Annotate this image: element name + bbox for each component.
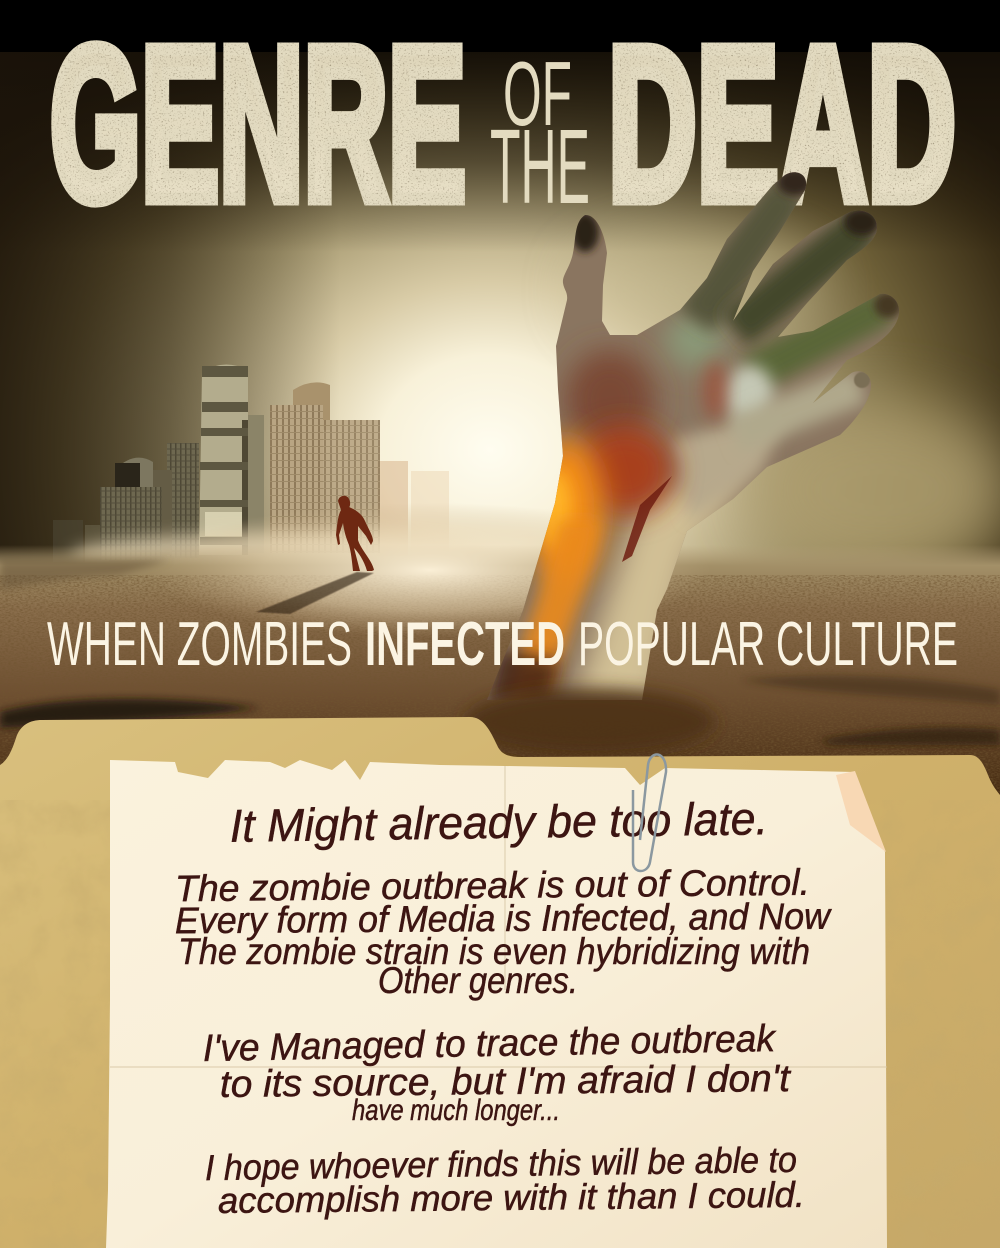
paragraph one xyxy=(175,862,832,1001)
desert ground xyxy=(0,500,1000,800)
paragraph three: I hope whoever finds this will be able to xyxy=(205,1139,797,1188)
back of hand xyxy=(565,350,655,450)
subtitle: infected: INFECTED xyxy=(365,610,565,679)
far towers xyxy=(53,461,449,562)
main tower xyxy=(248,415,264,553)
left towers xyxy=(167,443,199,558)
manila folder xyxy=(0,717,1000,1248)
pale knuckles and pinky xyxy=(726,365,774,425)
paragraph three: accomplish more with it than I could. xyxy=(218,1174,805,1221)
wrist and lower arm xyxy=(564,474,756,700)
ground haze xyxy=(70,533,490,577)
paragraph two: to its source, but I'm afraid I don't xyxy=(220,1058,792,1106)
title word: OF: OF xyxy=(503,44,572,145)
paragraph two xyxy=(203,1018,792,1127)
title word: GENRE: GENRE xyxy=(50,3,466,246)
paragraph two: have much longer... xyxy=(352,1094,560,1127)
headline line: It Might already be too late. xyxy=(230,792,768,852)
black top band xyxy=(0,0,1000,52)
blood spatter xyxy=(703,360,727,420)
subtitle: when zombies: WHEN ZOMBIES xyxy=(47,610,352,679)
paragraph three xyxy=(205,1139,805,1221)
title: GENRE OF THE DEAD xyxy=(50,3,956,246)
paragraph one: The zombie outbreak is out of Control. xyxy=(175,862,810,909)
right towers xyxy=(293,382,330,430)
green finger tones xyxy=(665,312,725,368)
paragraph one: Every form of Media is Infected, and Now xyxy=(175,896,832,941)
zombie hand rising from the sand xyxy=(487,168,902,710)
note paper xyxy=(106,760,887,1248)
paragraph one: The zombie strain is even hybridizing with xyxy=(178,931,810,972)
paragraph two: I've Managed to trace the outbreak xyxy=(203,1018,777,1070)
background: dusty sky xyxy=(0,0,1000,800)
subtitle xyxy=(47,610,958,679)
paperclip xyxy=(633,755,666,871)
dark fingertips xyxy=(571,212,599,252)
folded corner xyxy=(836,771,886,852)
glowing orange side xyxy=(528,438,604,582)
handwritten note xyxy=(175,792,832,1221)
paragraph one: Other genres. xyxy=(378,960,578,1001)
zombie figure xyxy=(256,496,374,614)
title: GENRE OF THE DEAD: THE xyxy=(490,108,590,226)
wound xyxy=(622,476,672,562)
paper folds xyxy=(110,766,887,1067)
sand spray around arm base xyxy=(465,688,715,756)
city skyline xyxy=(53,364,490,577)
